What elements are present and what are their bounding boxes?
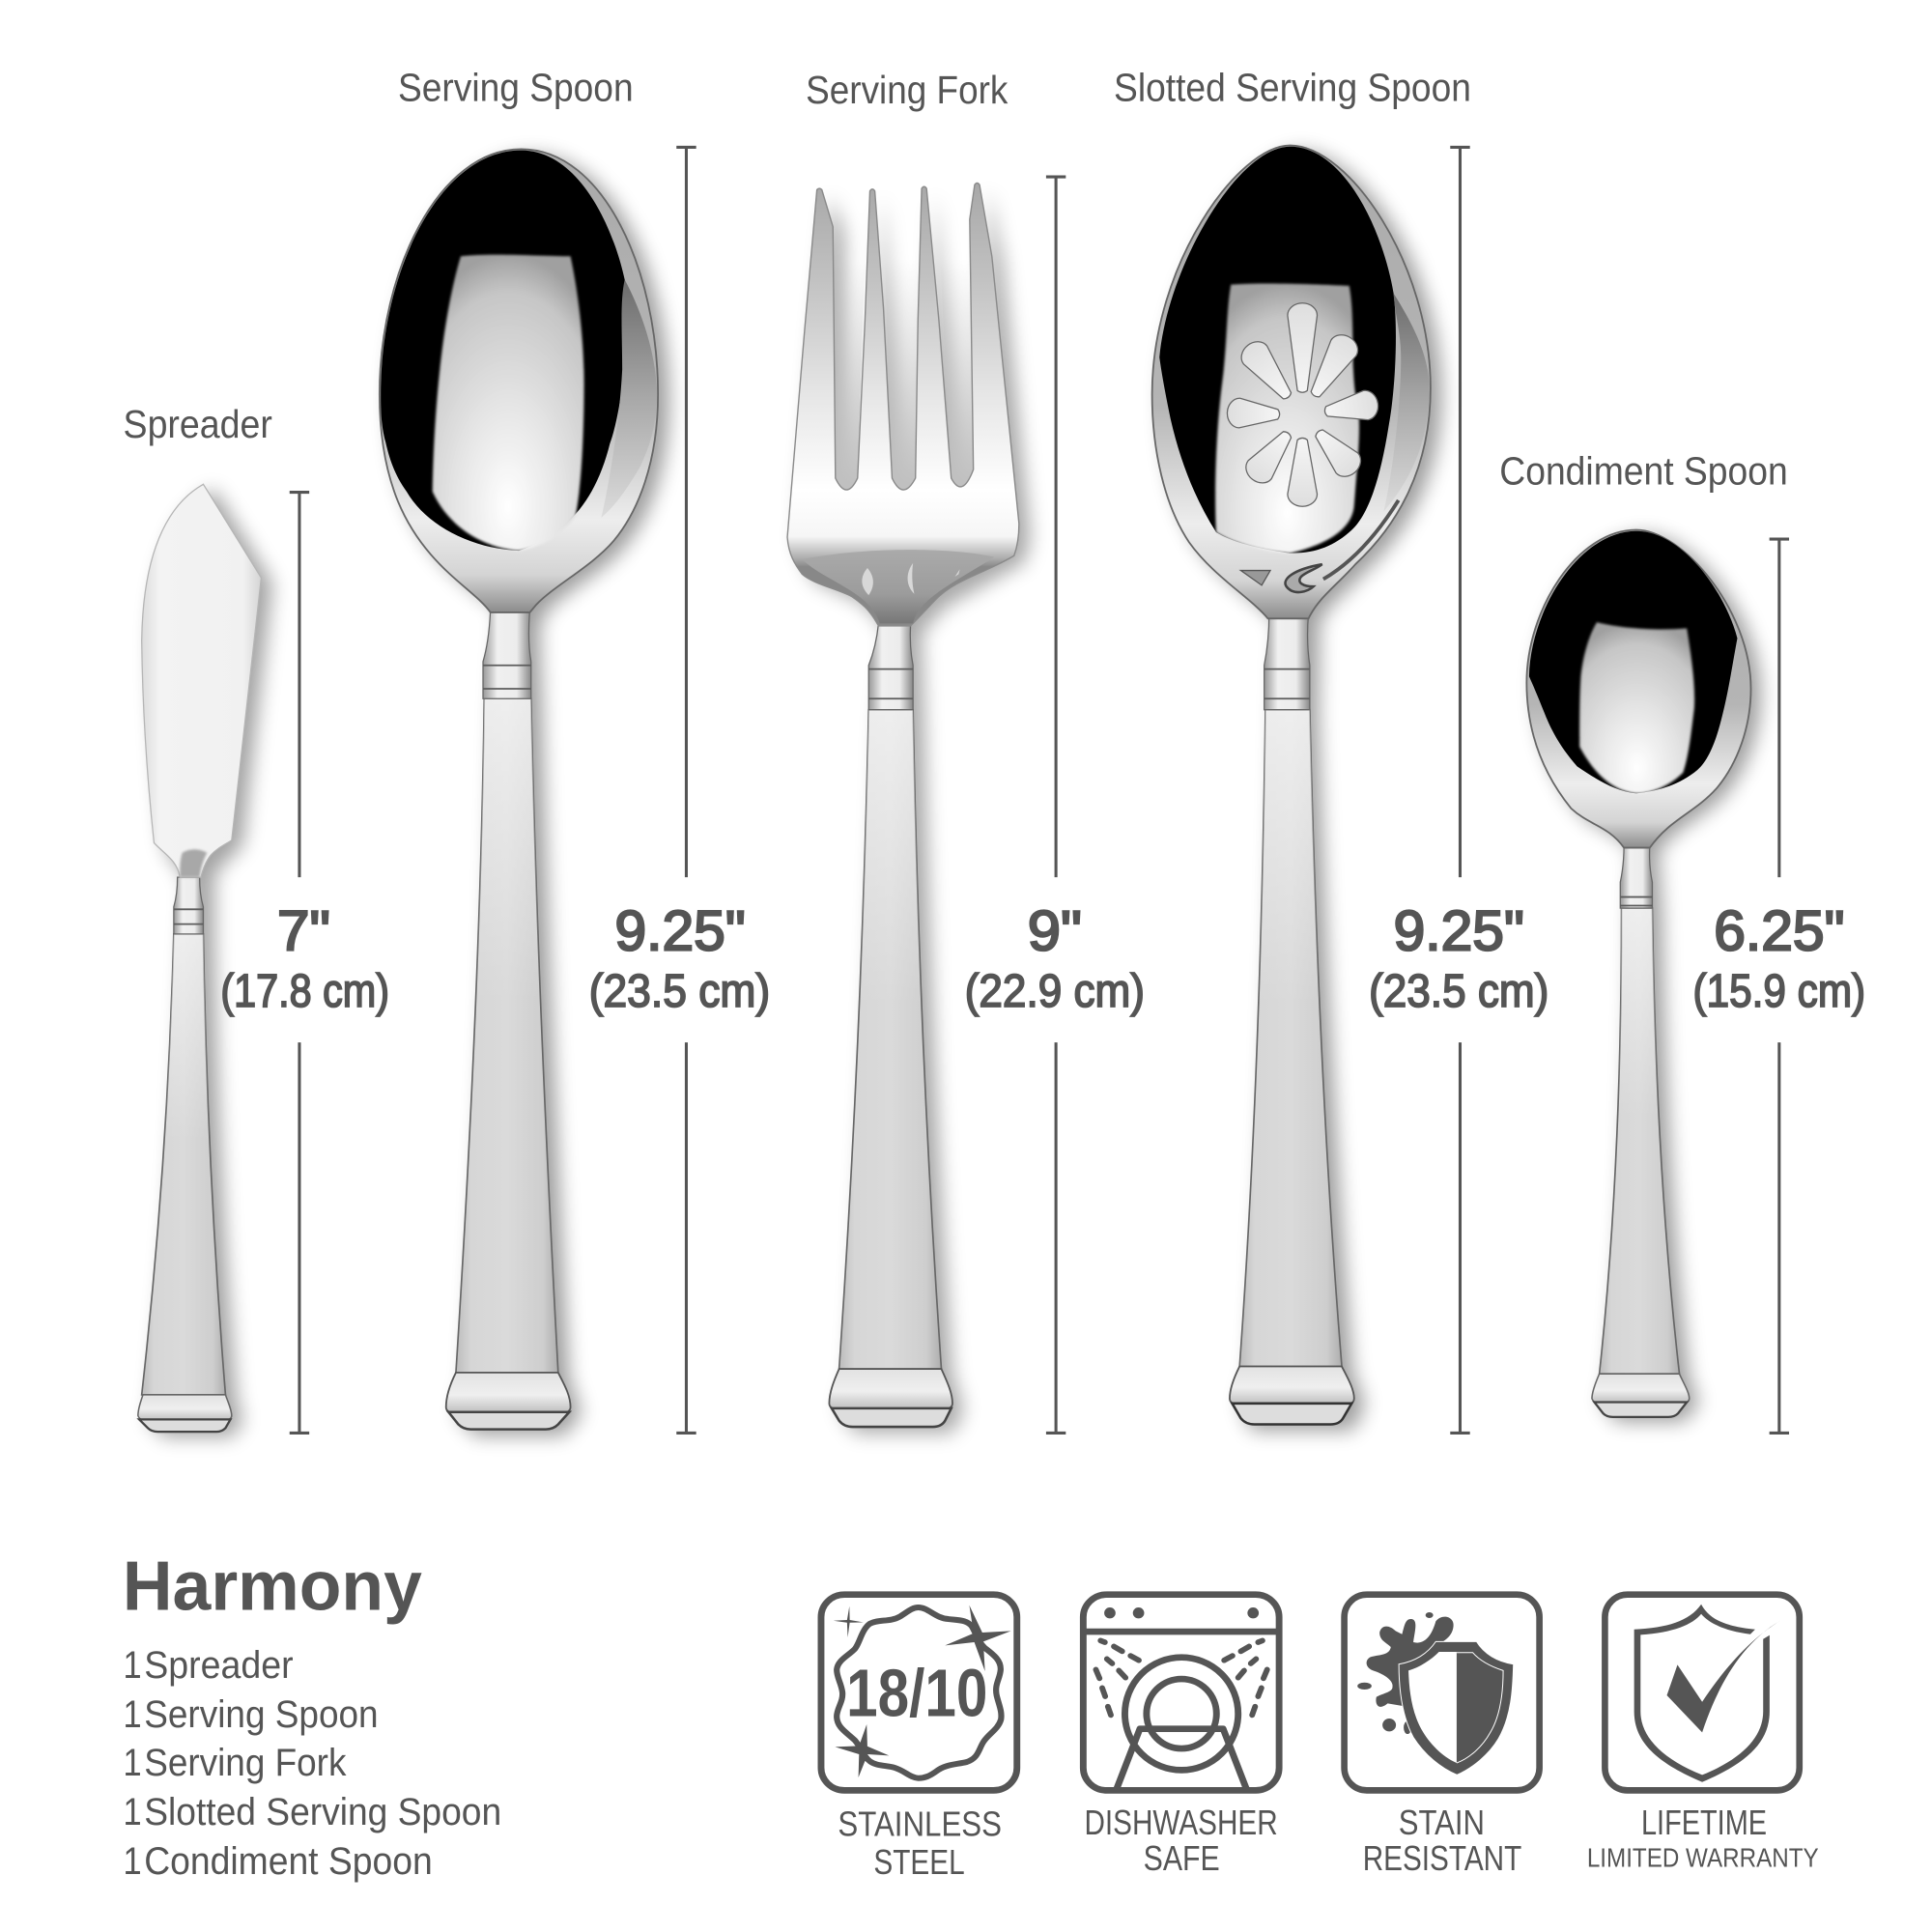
caption: stainless steel: STAINLESS (838, 1805, 1002, 1844)
dimension line: condiment spoon (1770, 539, 1789, 1433)
dimension line: serving spoon (676, 147, 696, 1433)
caption: stain resistant: STAIN (1399, 1804, 1485, 1842)
dimension: spreader 7 inch: 7" (277, 899, 330, 962)
slotted spoon bowl (1152, 146, 1431, 618)
set contents list: 1 (124, 1644, 142, 1687)
lower bowl marks (1240, 500, 1399, 592)
fork gaps (835, 259, 974, 490)
slotted spoon handle (1230, 613, 1354, 1424)
dimension: condiment spoon 6.25 inch (1693, 899, 1865, 1017)
product: condiment spoon (1526, 529, 1761, 1422)
dimension: serving spoon 9.25 inch: (23.5 cm) (589, 965, 770, 1017)
set contents list: Serving Spoon (144, 1693, 379, 1736)
product: spreader (138, 484, 272, 1436)
dimension line: spreader (290, 493, 309, 1433)
product: serving fork (787, 183, 1030, 1433)
serving spoon handle (446, 610, 571, 1430)
product: serving spoon (380, 149, 669, 1435)
caption: lifetime limited warranty (1587, 1804, 1819, 1872)
caption: stainless steel (838, 1805, 1002, 1882)
set contents list: 1 (124, 1840, 142, 1883)
slots (1227, 303, 1380, 506)
icon: stain resistant (1345, 1595, 1540, 1790)
caption: lifetime limited warranty: LIMITED WARRANTY (1587, 1842, 1819, 1872)
icon: lifetime warranty shield (1605, 1595, 1800, 1790)
condiment spoon handle (1592, 845, 1690, 1417)
condiment spoon bowl (1526, 529, 1750, 848)
dimension: serving fork 9 inch (965, 899, 1145, 1017)
set contents list: 1 (124, 1693, 142, 1736)
dimension: condiment spoon 6.25 inch: 6.25" (1714, 899, 1844, 962)
fork head with tines (787, 183, 1019, 626)
set contents list (124, 1644, 501, 1883)
dimension line: slotted spoon (1450, 147, 1470, 1433)
dimension: spreader 7 inch: (17.8 cm) (220, 965, 389, 1017)
set contents list: Slotted Serving Spoon (144, 1791, 501, 1833)
dimension: serving fork 9 inch: (22.9 cm) (965, 965, 1145, 1017)
dimension: spreader 7 inch (220, 899, 389, 1017)
caption: stain resistant (1363, 1804, 1521, 1878)
spreader handle (138, 877, 232, 1432)
icon: 18/10 stainless steel (821, 1595, 1017, 1790)
label: Serving Spoon: Serving Spoon (398, 66, 634, 110)
dimension: serving spoon 9.25 inch: 9.25" (614, 899, 746, 962)
label: Slotted Serving Spoon: Slotted Serving Spoon (1114, 66, 1471, 110)
caption: lifetime limited warranty: LIFETIME (1641, 1804, 1767, 1842)
set contents list: Spreader (144, 1644, 294, 1687)
product: slotted serving spoon (1152, 146, 1441, 1431)
label: Serving Fork: Serving Fork (806, 68, 1009, 112)
fork handle (829, 623, 952, 1427)
set contents list: 1 (124, 1742, 142, 1784)
dimension: serving fork 9 inch: 9" (1028, 899, 1082, 962)
caption: dishwasher safe: SAFE (1144, 1839, 1220, 1878)
set contents list: Serving Fork (144, 1742, 347, 1784)
label: Condiment Spoon: Condiment Spoon (1499, 448, 1788, 493)
caption: dishwasher safe (1084, 1804, 1278, 1878)
caption: stainless steel: STEEL (873, 1843, 965, 1882)
set contents list: 1 (124, 1791, 142, 1833)
dimension line: serving fork (1046, 177, 1065, 1433)
dimension: serving spoon 9.25 inch (589, 899, 770, 1017)
dimension: slotted spoon 9.25 inch: 9.25" (1394, 899, 1524, 962)
caption: dishwasher safe: DISHWASHER (1084, 1804, 1278, 1842)
caption: stain resistant: RESISTANT (1363, 1839, 1521, 1878)
label: Spreader: Spreader (124, 402, 272, 446)
icon: 18/10 stainless steel: 18/10 (846, 1656, 987, 1730)
dimension: slotted spoon 9.25 inch (1369, 899, 1548, 1017)
dimension: condiment spoon 6.25 inch: (15.9 cm) (1693, 965, 1865, 1017)
set contents list: Condiment Spoon (144, 1840, 433, 1883)
serving spoon bowl (380, 149, 658, 612)
icon: dishwasher safe (1083, 1595, 1279, 1790)
title: Harmony: Harmony (123, 1547, 422, 1625)
spreader blade (142, 484, 261, 877)
fork neck reflection (802, 550, 994, 623)
dimension: slotted spoon 9.25 inch: (23.5 cm) (1369, 965, 1548, 1017)
